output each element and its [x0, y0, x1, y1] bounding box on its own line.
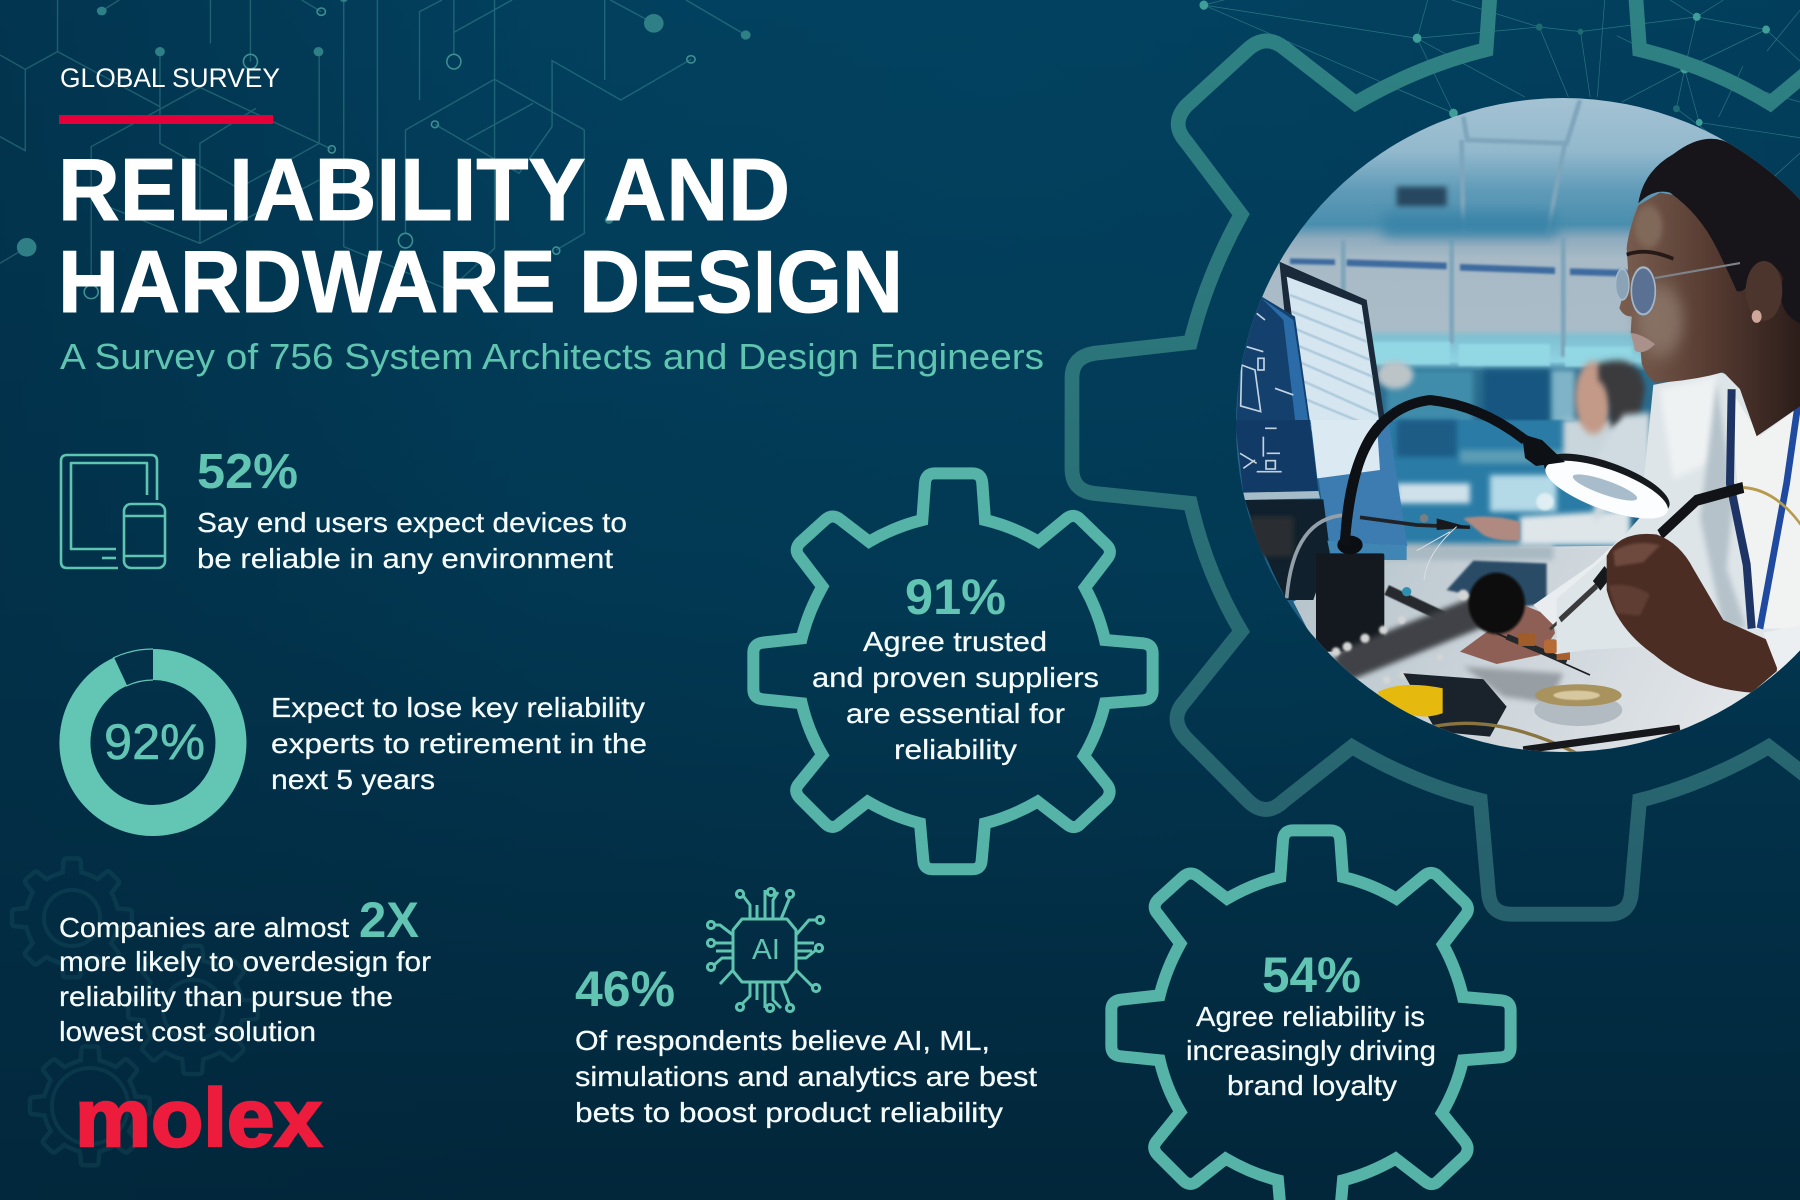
value: 91%	[905, 569, 1006, 625]
value: 2X	[359, 892, 419, 948]
value: 92%	[104, 714, 205, 770]
header	[58, 63, 1044, 377]
description: brand loyalty	[1227, 1070, 1397, 1101]
description: are essential for	[846, 698, 1065, 729]
network line pattern	[1199, 0, 1800, 179]
gear stat: 91%	[753, 473, 1153, 869]
subtitle: A Survey of 756 System Architects and Design Engineers	[60, 336, 1044, 377]
woman	[1539, 139, 1800, 693]
stat: 2X overdesign: reliability than pursue the	[59, 981, 393, 1012]
logo: molex: molex	[75, 1073, 322, 1164]
monitors	[1236, 262, 1387, 433]
red accent bar	[59, 115, 273, 124]
photo: engineer at electronics workbench	[1230, 90, 1800, 787]
gear outline	[753, 473, 1153, 869]
description: and proven suppliers	[812, 662, 1099, 693]
description: Agree trusted	[863, 626, 1047, 657]
stat: 2X overdesign: Companies are almost	[59, 912, 349, 943]
lamp head behind handle	[1544, 454, 1670, 509]
icon label: AI	[752, 934, 780, 966]
gear stat: 54%	[1111, 830, 1511, 1200]
description: reliability	[894, 734, 1017, 765]
description: experts to retirement in the	[271, 728, 647, 759]
title	[58, 140, 903, 331]
stat: 2X overdesign: more likely to overdesign for	[59, 946, 431, 977]
description: simulations and analytics are best	[575, 1061, 1037, 1092]
description: next 5 years	[271, 764, 435, 795]
blurred clamp foreground	[1350, 610, 1483, 663]
yellow spool and black tray	[1403, 673, 1507, 737]
value: 46%	[575, 961, 675, 1017]
stat: 92% donut	[75, 649, 647, 821]
icon: tablet and phone	[61, 455, 165, 568]
lamp arm	[1345, 400, 1565, 545]
icon: AI chip	[707, 888, 824, 1012]
description: bets to boost product reliability	[575, 1097, 1003, 1128]
stat: 46% AI	[575, 888, 1037, 1128]
description	[197, 507, 627, 574]
donut chart	[75, 649, 231, 821]
faint decorative gears	[12, 858, 258, 1165]
stat: 2X overdesign	[59, 892, 431, 1047]
desk tools	[1345, 417, 1390, 540]
title: HARDWARE DESIGN	[58, 232, 903, 331]
stat: 52% devices	[61, 445, 627, 574]
description: increasingly driving	[1186, 1035, 1436, 1066]
value: 52%	[197, 445, 298, 499]
description	[812, 626, 1099, 765]
description: Expect to lose key reliability	[271, 692, 645, 723]
description: Say end users expect devices to	[197, 507, 627, 538]
description: Agree reliability is	[1196, 1001, 1425, 1032]
large gear outline	[1072, 0, 1800, 914]
description	[1186, 1001, 1436, 1101]
woman's near hand and cuff	[1460, 605, 1555, 664]
title: RELIABILITY AND	[58, 140, 790, 239]
eyebrow: global survey: GLOBAL SURVEY	[60, 63, 280, 93]
description	[271, 692, 647, 795]
description	[575, 1025, 1037, 1128]
value: 54%	[1262, 947, 1361, 1003]
description: be reliable in any environment	[197, 543, 613, 574]
desk surface	[1293, 546, 1800, 752]
description: Of respondents believe AI, ML,	[575, 1025, 990, 1056]
gear outline	[1111, 830, 1511, 1200]
stat: 2X overdesign: lowest cost solution	[59, 1016, 316, 1047]
circuit line pattern	[0, 0, 751, 299]
